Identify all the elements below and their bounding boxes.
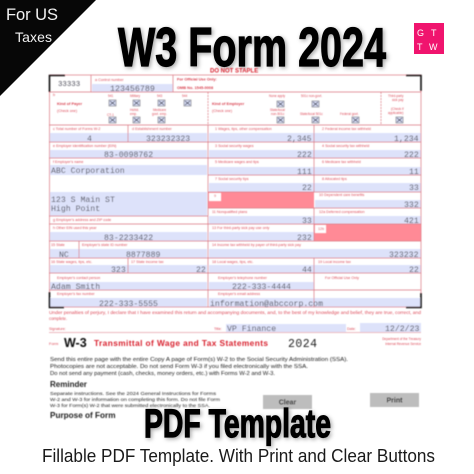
reminder section: Purpose of Form <box>50 411 116 420</box>
box b: kind of payer: govt. emp. <box>152 112 167 116</box>
instructions <box>50 357 348 377</box>
wage boxes, right columns: 332 <box>404 201 419 210</box>
instructions: Photocopies are not acceptable. Do not send Form W-3 if you filed electronically with the SSA. <box>50 364 308 370</box>
employer boxes, left column: 15 State <box>51 243 65 247</box>
perjury statement: Under penalties of perjury, I declare that I have examined this return and accompanying documents, and, to the best of my knowledge and belief, they are true, correct, and <box>49 310 422 315</box>
wage boxes, right columns: 111 <box>297 168 312 177</box>
employer boxes, left column: Employer's state ID number <box>82 243 128 247</box>
employer boxes, left column: High Point <box>51 204 100 214</box>
wage boxes, right columns: 2,345 <box>287 135 312 144</box>
kind of employer: Third-party <box>388 94 404 98</box>
form heading: Transmittal of Wage and Tax Statements <box>94 338 268 348</box>
wage boxes, right columns: 421 <box>404 217 419 226</box>
form heading: W-3 <box>64 336 87 350</box>
clear button: Clear <box>279 400 297 406</box>
box a: control numbers: a Control number <box>95 78 124 82</box>
wage boxes, right columns: 19 Local income tax <box>318 260 351 264</box>
caption: Fillable PDF Template. With Print and Clear Buttons <box>42 445 435 466</box>
wage boxes, right columns: information@abccorp.com <box>210 299 323 309</box>
wage boxes, right columns: 5 Medicare wages and tips <box>215 160 259 164</box>
wage boxes, right columns: 10 Dependent care benefits <box>319 193 364 197</box>
employer boxes, left column: 123 S Main ST <box>51 195 115 205</box>
print button: Print <box>387 398 403 404</box>
wage boxes, right columns: 33 <box>302 217 312 226</box>
box b: kind of payer: b <box>53 93 55 97</box>
logo: GTW: W <box>429 42 438 52</box>
box a: control numbers: OMB No. 1545-0008 <box>177 85 214 90</box>
box b: kind of payer: Medicare <box>153 108 166 112</box>
wage boxes, right columns: 11 <box>409 168 419 177</box>
subtitle: PDF Template: PDF Template <box>144 402 331 446</box>
wage boxes, right columns: 7 Social security tips <box>215 177 249 181</box>
wage boxes, right columns: 8 Allocated tips <box>322 177 347 181</box>
employer boxes, left column <box>51 127 206 309</box>
wage boxes, right columns: 6 Medicare tax withheld <box>322 160 361 164</box>
corner banner: For US Taxes <box>0 0 96 96</box>
kind of employer: Kind of Employer <box>212 101 245 106</box>
box a: control numbers: 123456789 <box>110 85 155 94</box>
employer boxes, left column: 8877889 <box>126 251 160 260</box>
wage boxes, right columns: 44 <box>302 266 312 275</box>
wage boxes, right columns: 1 Wages, tips, other compensation <box>215 127 272 131</box>
signature row <box>49 323 421 334</box>
employer boxes, left column: 323232323 <box>146 135 190 144</box>
W-3 form <box>49 68 422 420</box>
wage boxes, right columns: 232 <box>297 234 312 243</box>
employer boxes, left column: 22 <box>196 266 206 275</box>
employer boxes, left column: 83-0098762 <box>104 151 153 160</box>
employer boxes, left column: 17 State income tax <box>131 260 164 264</box>
employer boxes, left column: h Other EIN used this year <box>53 226 97 230</box>
wage boxes, right columns: 14 Income tax withheld by payer of third-party sick pay <box>212 243 301 247</box>
employer boxes, left column: Employer's fax number <box>57 292 95 296</box>
form heading: 2024 <box>288 338 317 351</box>
signature row: Date: <box>347 327 356 331</box>
box a: control numbers: 33333 <box>58 81 80 89</box>
logo: GTW: T <box>417 42 423 52</box>
box a: control numbers: For Official Use Only: <box>177 76 217 82</box>
wage boxes, right columns: 18 Local wages, tips, etc. <box>212 260 253 264</box>
box b: kind of payer: emp. <box>130 112 137 116</box>
logo: GTW <box>414 23 444 54</box>
field fills <box>50 84 421 307</box>
wage boxes, right columns: 11 Nonqualified plans <box>212 210 247 214</box>
box b: kind of payer: CT-1 <box>107 113 114 117</box>
instructions: Send this entire page with the entire Copy A page of Form(s) W-2 to the Social Security Administration (SSA). <box>50 357 348 363</box>
wage boxes, right columns: 222 <box>404 151 419 160</box>
clear button <box>263 395 312 409</box>
wage boxes, right columns: 2 Federal income tax withheld <box>322 127 371 131</box>
employer boxes, left column: e Employer identification number (EIN) <box>53 144 116 148</box>
reminder section: W-3 for Form(s) W-2 that were submitted electronically to the SSA. <box>50 403 210 409</box>
box b: kind of payer <box>53 93 191 123</box>
print button <box>370 393 419 407</box>
form grid lines <box>49 75 421 307</box>
signature row: VP Finance <box>227 324 276 334</box>
box b: kind of payer: 944 <box>182 94 188 98</box>
wage boxes, right columns: 12b <box>318 227 324 231</box>
do not staple notice: DO NOT STAPLE <box>210 68 258 74</box>
kind of employer: State/local <box>270 108 285 112</box>
wage boxes, right columns: 4 Social security tax withheld <box>322 144 369 148</box>
employer boxes, left column: c Total number of Forms W-2 <box>53 127 100 131</box>
kind of employer: Federal govt. <box>340 112 359 116</box>
corner banner: For US Taxes: Taxes <box>15 29 52 45</box>
reminder section: Separate instructions. See the 2024 General Instructions for Forms <box>50 391 217 397</box>
employer boxes, left column: 323 <box>111 266 126 275</box>
wage boxes, right columns: 22 <box>302 184 312 193</box>
employer boxes, left column: NC <box>59 251 69 260</box>
wage boxes, right columns: 222-333-4444 <box>232 283 291 292</box>
logo: GTW: T <box>431 28 437 38</box>
wage boxes, right columns: 3 Social security wages <box>215 144 254 148</box>
wage boxes, right columns: Employer's telephone number <box>218 276 268 280</box>
kind of employer: State/local 501c <box>300 112 323 116</box>
wage boxes, right columns: 323232 <box>389 251 419 260</box>
employer boxes, left column: 222-333-5555 <box>99 300 158 309</box>
employer boxes, left column: Adam Smith <box>51 282 100 292</box>
employer boxes, left column: g Employer's address and ZIP code <box>53 218 111 222</box>
signature row: 12/2/23 <box>385 324 419 334</box>
kind of employer <box>212 94 404 123</box>
wage boxes, right columns: For Official Use Only <box>325 276 359 280</box>
form heading <box>49 336 421 351</box>
employer boxes, left column: Employer's contact person <box>57 276 100 280</box>
box b: kind of payer: Military <box>130 94 140 98</box>
kind of employer: (Check if <box>391 107 404 111</box>
employer boxes, left column: 83-2233422 <box>104 234 153 243</box>
kind of employer: applicable) <box>388 111 403 115</box>
logo: GTW: G <box>417 28 424 38</box>
wage boxes, right columns: 13 For third-party sick pay use only <box>212 226 270 230</box>
reminder section <box>50 380 220 420</box>
form heading: Internal Revenue Service <box>385 342 421 346</box>
kind of employer: sick pay <box>392 98 404 102</box>
wage boxes, right columns: 33 <box>409 184 419 193</box>
perjury statement: complete. <box>49 316 67 321</box>
corner banner: For US Taxes: For US <box>6 6 58 24</box>
form heading: Department of the Treasury <box>382 337 421 341</box>
employer boxes, left column: f Employer's name <box>53 160 83 164</box>
box a: control numbers <box>58 76 217 94</box>
perjury statement <box>49 310 422 321</box>
box b: kind of payer: 943 <box>157 94 163 98</box>
kind of employer: None apply <box>269 94 286 98</box>
wage boxes, right columns: 9 <box>214 194 216 198</box>
wage boxes, right columns: 222 <box>297 151 312 160</box>
box b: kind of payer: Hshld. <box>130 108 139 112</box>
wage boxes, right columns: 1,234 <box>394 135 419 144</box>
wage boxes, right columns: 12a Deferred compensation <box>319 210 365 214</box>
box b: kind of payer: (Check one) <box>57 109 77 113</box>
employer boxes, left column: ABC Corporation <box>51 166 125 176</box>
reminder section: W-2 and W-3 for information on completing this form. Do not file Form <box>50 397 220 403</box>
employer boxes, left column: d Establishment number <box>132 127 173 131</box>
wage boxes, right columns: Employer's email address <box>218 292 260 296</box>
kind of employer: 501c non-govt. <box>301 94 322 98</box>
signature row: Signature: <box>49 327 66 331</box>
box b: kind of payer: 941 <box>108 94 114 98</box>
instructions: Do not send any payment (cash, checks, money orders, etc.) with Forms W-2 and W-3. <box>50 371 275 377</box>
black corner marks <box>50 76 421 308</box>
kind of employer: (Check one) <box>212 109 232 113</box>
wage boxes, right columns <box>210 127 419 309</box>
kind of employer: non-501c <box>271 112 285 116</box>
employer boxes, left column: 4 <box>87 135 92 144</box>
wage boxes, right columns: 22 <box>409 266 419 275</box>
form heading: Form <box>49 341 59 346</box>
employer boxes, left column: 16 State wages, tips, etc. <box>51 260 92 264</box>
box b: kind of payer: Kind of Payer <box>57 101 83 106</box>
signature row: Title: <box>214 327 222 331</box>
reminder section: Reminder <box>50 380 87 389</box>
